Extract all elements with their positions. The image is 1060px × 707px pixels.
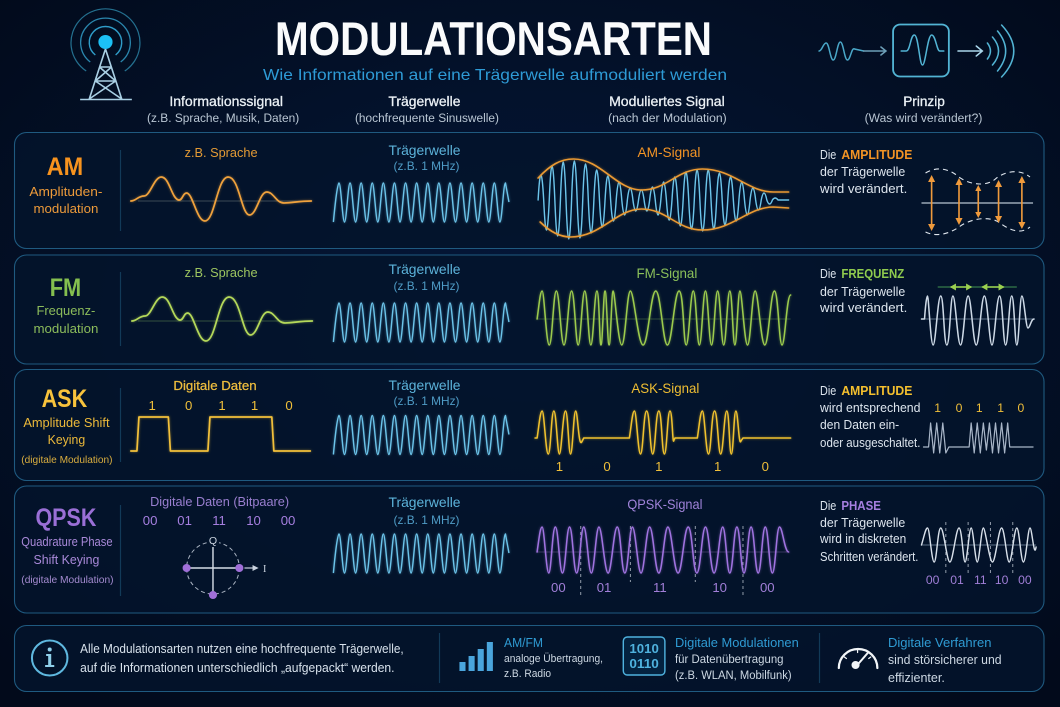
- column heading: Trägerwelle: (hochfrequente Sinuswelle): [355, 111, 499, 125]
- panel: AM: [14, 132, 1044, 248]
- ASK modulated signal: [535, 381, 791, 474]
- FM carrier wave: (z.B. 1 MHz): [394, 279, 460, 293]
- ASK digital data: 1: [148, 398, 156, 413]
- ASK digital data: 1: [251, 398, 258, 413]
- QPSK modulated signal: 01: [597, 580, 611, 595]
- icon: modulation principle: [819, 24, 1014, 77]
- ASK principle diagram: on-off wave: 0: [1017, 401, 1025, 415]
- QPSK principle text: der Trägerwelle: [820, 516, 905, 530]
- ASK principle text: Die: [820, 384, 836, 398]
- panel: ASK: [14, 370, 1044, 480]
- AM information signal: [131, 145, 311, 221]
- ASK label: Amplitude Shift: [23, 415, 110, 430]
- QPSK digital data: 00: [281, 513, 295, 528]
- ASK label: [21, 385, 113, 466]
- info text: auf die Informationen unterschiedlich „aufgepackt“ werden.: [80, 661, 395, 675]
- QPSK constellation diagram: Q: [209, 535, 217, 547]
- QPSK digital data: 00: [143, 513, 157, 528]
- QPSK principle text: [819, 499, 918, 564]
- QPSK principle diagram: phase jumps: 11: [974, 573, 987, 587]
- digital modulation note: Digitale Modulationen: [675, 635, 799, 650]
- QPSK principle diagram: phase jumps: 01: [950, 573, 964, 587]
- QPSK principle text: Die: [820, 499, 836, 513]
- digital modulation note: für Datenübertragung: [675, 652, 784, 666]
- FM label: [33, 274, 98, 336]
- digital methods note: [888, 635, 1002, 685]
- FM modulated signal: FM-Signal: [636, 266, 697, 281]
- FM label: modulation: [33, 321, 98, 336]
- QPSK label: (digitale Modulation): [21, 574, 114, 586]
- FM label: Frequenz-: [37, 303, 95, 318]
- FM principle diagram: frequency arrows and wave: [921, 284, 1034, 345]
- ASK principle text: oder ausgeschaltet.: [820, 436, 920, 450]
- QPSK digital data: 10: [246, 513, 261, 528]
- digital methods note: Digitale Verfahren: [888, 635, 991, 650]
- QPSK principle text: wird in diskreten: [819, 532, 906, 546]
- ASK label: (digitale Modulation): [21, 454, 113, 466]
- digital modulation note: [675, 635, 799, 682]
- AM carrier wave: Trägerwelle: [388, 143, 460, 158]
- icon: binary box: 0110: [629, 656, 659, 671]
- QPSK modulated signal: 00: [551, 580, 566, 595]
- QPSK principle diagram: phase jumps: 10: [995, 573, 1009, 587]
- AM label: [29, 153, 102, 216]
- QPSK label: [21, 504, 114, 586]
- icon: info: [32, 640, 67, 676]
- ASK modulated signal: 0: [762, 459, 769, 474]
- digital methods note: sind störsicherer und: [888, 653, 1002, 667]
- AM principle text: AMPLITUDE: [841, 148, 912, 162]
- column heading: Trägerwelle: Trägerwelle: [388, 94, 460, 109]
- column heading: Prinzip: [865, 94, 982, 125]
- QPSK modulated signal: 10: [712, 580, 727, 595]
- ASK principle text: [819, 384, 920, 450]
- ASK modulated signal: 1: [714, 459, 721, 474]
- column heading: Moduliertes Signal: [608, 94, 727, 125]
- icon: signal bars: [459, 642, 493, 671]
- ASK modulated signal: 1: [655, 459, 662, 474]
- AM principle diagram: amplitude arrows: [921, 169, 1033, 235]
- digital methods note: effizienter.: [888, 671, 945, 685]
- ASK modulated signal: 0: [603, 459, 611, 474]
- QPSK label: Quadrature Phase: [21, 534, 113, 549]
- QPSK constellation diagram: I: [263, 564, 266, 575]
- QPSK carrier wave: [333, 495, 509, 573]
- AM carrier wave: (z.B. 1 MHz): [394, 159, 460, 173]
- QPSK carrier wave: (z.B. 1 MHz): [394, 513, 460, 527]
- column heading: Trägerwelle: [355, 94, 499, 125]
- ASK principle diagram: on-off wave: 0: [956, 401, 963, 415]
- QPSK label: QPSK: [35, 504, 96, 532]
- QPSK principle diagram: phase jumps: [921, 522, 1036, 587]
- ASK modulated signal: ASK-Signal: [631, 381, 699, 396]
- ASK digital data: 0: [185, 398, 192, 413]
- column heading: Prinzip: Prinzip: [903, 94, 945, 109]
- icon: binary box: [623, 637, 665, 675]
- FM principle text: FREQUENZ: [841, 267, 905, 281]
- AM modulated signal: [538, 145, 789, 239]
- panel: FM: [14, 255, 1044, 364]
- FM carrier wave: Trägerwelle: [388, 262, 460, 277]
- FM principle text: wird verändert.: [819, 301, 907, 315]
- QPSK modulated signal: 00: [760, 580, 775, 595]
- icon: binary box: 1010: [629, 641, 659, 656]
- QPSK principle diagram: phase jumps: 00: [926, 573, 940, 587]
- AM/FM note: [504, 636, 603, 680]
- digital modulation note: (z.B. WLAN, Mobilfunk): [675, 668, 792, 682]
- column heading: Moduliertes Signal: (nach der Modulation): [608, 111, 727, 125]
- AM label: Amplituden-: [29, 184, 102, 199]
- ASK digital data: [131, 378, 310, 451]
- QPSK digital data: 11: [212, 513, 226, 528]
- AM principle text: [819, 148, 912, 196]
- ASK digital data: 1: [218, 398, 226, 413]
- AM/FM note: AM/FM: [504, 636, 543, 650]
- FM principle text: Die: [820, 267, 836, 281]
- ASK carrier wave: Trägerwelle: [388, 378, 460, 393]
- panel: QPSK: [14, 486, 1044, 613]
- AM information signal: z.B. Sprache: [185, 145, 258, 160]
- ASK modulated signal: 1: [556, 459, 563, 474]
- FM information signal: [132, 265, 312, 341]
- QPSK constellation diagram: [183, 534, 266, 599]
- icon: speedometer: [839, 649, 877, 668]
- QPSK digital data: 01: [177, 513, 192, 528]
- QPSK carrier wave: Trägerwelle: [388, 495, 460, 510]
- ASK principle text: AMPLITUDE: [841, 384, 912, 398]
- QPSK digital data: Digitale Daten (Bitpaare): [150, 494, 289, 509]
- column heading: Moduliertes Signal: Moduliertes Signal: [609, 94, 725, 109]
- ASK principle diagram: on-off wave: 1: [934, 401, 941, 415]
- AM carrier wave: [333, 143, 509, 222]
- ASK label: ASK: [42, 385, 87, 413]
- ASK label: Keying: [48, 432, 85, 447]
- QPSK label: Shift Keying: [33, 552, 99, 567]
- column heading: Informationssignal: Informationssignal: [169, 94, 283, 109]
- icon: radio tower: [71, 9, 140, 99]
- subtitle: Wie Informationen auf eine Trägerwelle aufmoduliert werden: [263, 67, 727, 84]
- AM label: AM: [47, 153, 83, 181]
- ASK principle text: wird entsprechend: [819, 401, 920, 415]
- FM principle text: [819, 267, 907, 315]
- QPSK modulated signal: 11: [653, 580, 667, 595]
- AM modulated signal: AM-Signal: [638, 145, 700, 160]
- QPSK digital data: [143, 494, 295, 528]
- panel: summary footer: [14, 626, 1044, 692]
- title: MODULATIONSARTEN: [275, 12, 712, 65]
- info text: Alle Modulationsarten nutzen eine hochfrequente Trägerwelle,: [80, 642, 404, 656]
- FM carrier wave: [333, 262, 509, 342]
- QPSK modulated signal: QPSK-Signal: [627, 497, 702, 512]
- AM principle text: Die: [820, 148, 836, 162]
- AM/FM note: analoge Übertragung,: [504, 653, 603, 665]
- QPSK principle diagram: phase jumps: 00: [1018, 573, 1032, 587]
- QPSK principle text: PHASE: [841, 499, 881, 513]
- FM principle text: der Trägerwelle: [820, 285, 905, 299]
- ASK carrier wave: (z.B. 1 MHz): [394, 394, 460, 408]
- AM principle text: der Trägerwelle: [820, 165, 905, 179]
- AM label: modulation: [33, 201, 98, 216]
- FM label: FM: [50, 274, 81, 302]
- info text: [80, 642, 404, 675]
- AM/FM note: z.B. Radio: [504, 668, 551, 680]
- column heading: Prinzip: (Was wird verändert?): [865, 111, 982, 125]
- QPSK modulated signal: [537, 497, 789, 595]
- column heading: Informationssignal: (z.B. Sprache, Musik, Daten): [147, 111, 299, 125]
- ASK principle text: den Daten ein-: [820, 418, 899, 432]
- AM principle text: wird verändert.: [819, 182, 907, 196]
- ASK principle diagram: on-off wave: 1: [976, 401, 983, 415]
- QPSK principle text: Schritten verändert.: [820, 550, 918, 564]
- ASK digital data: 0: [285, 398, 293, 413]
- ASK principle diagram: on-off wave: [924, 401, 1033, 453]
- ASK carrier wave: [333, 378, 509, 454]
- ASK digital data: Digitale Daten: [173, 378, 257, 393]
- column heading: Informationssignal: [147, 94, 299, 125]
- FM information signal: z.B. Sprache: [185, 265, 258, 280]
- ASK principle diagram: on-off wave: 1: [997, 401, 1004, 415]
- FM modulated signal: [537, 266, 791, 345]
